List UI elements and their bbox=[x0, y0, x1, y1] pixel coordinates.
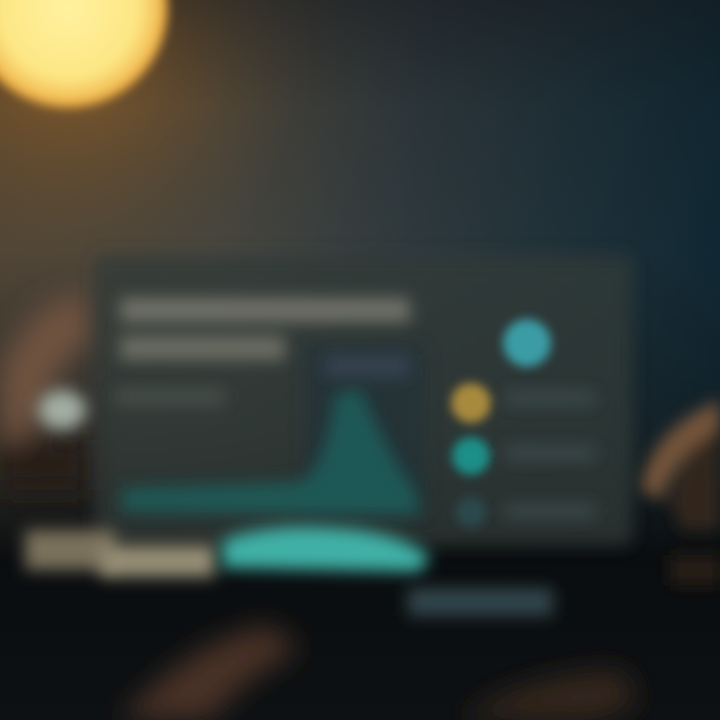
dark chart backdrop bbox=[305, 345, 425, 515]
legend rows bbox=[505, 392, 595, 517]
teal legend marker bbox=[452, 437, 490, 475]
glowing lower strip bbox=[25, 526, 430, 577]
left hand bbox=[0, 292, 95, 490]
heading bars bbox=[120, 298, 410, 360]
right hand bbox=[640, 400, 720, 585]
teal circle bbox=[503, 319, 551, 367]
area chart bbox=[122, 388, 420, 515]
lower hands bbox=[120, 625, 640, 720]
panel bbox=[38, 255, 633, 545]
sun bbox=[0, 0, 168, 108]
left white spot bbox=[38, 390, 86, 430]
text block bbox=[115, 388, 225, 406]
dark legend marker bbox=[456, 497, 486, 527]
yellow legend marker bbox=[451, 383, 491, 423]
chart top patch bbox=[325, 355, 410, 377]
lower device bar bbox=[408, 588, 553, 616]
